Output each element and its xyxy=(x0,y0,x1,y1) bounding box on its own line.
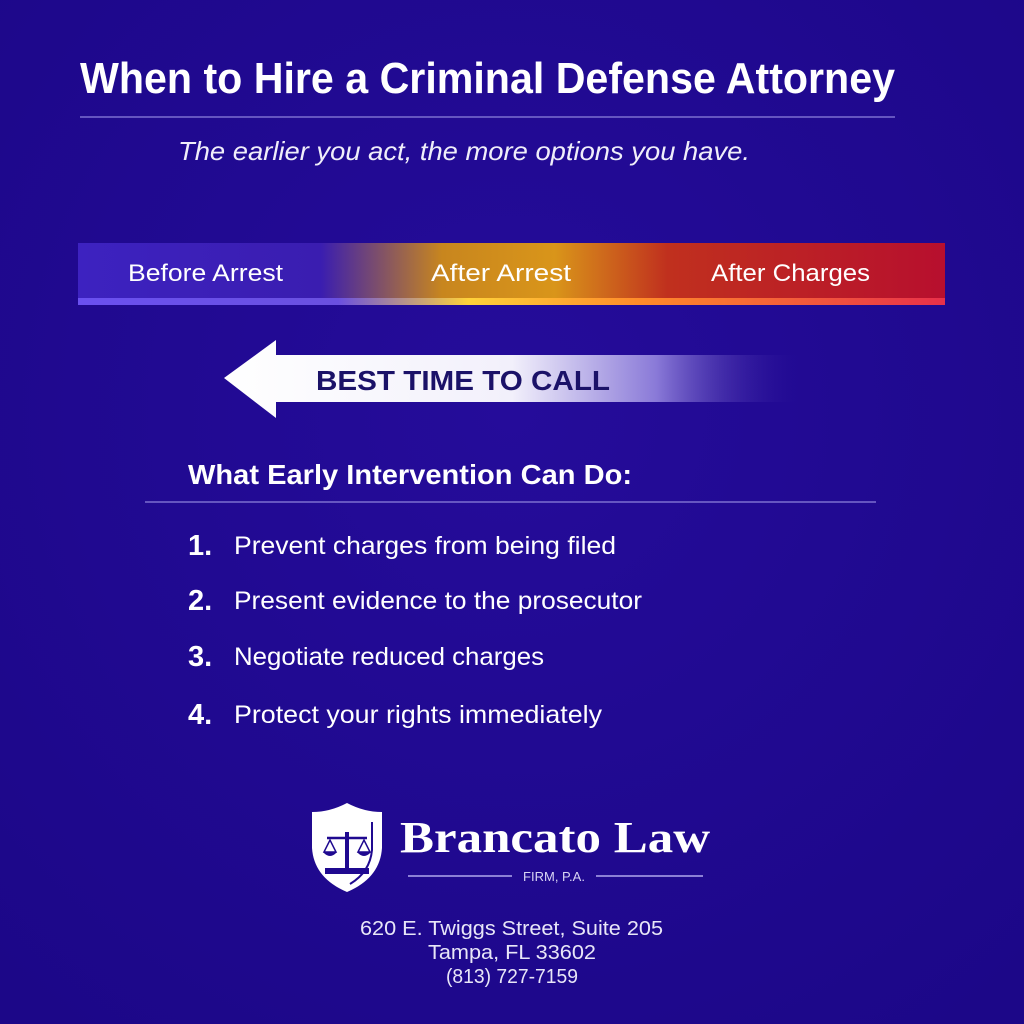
list: Present evidence to the prosecutor xyxy=(234,587,642,615)
title: When to Hire a Criminal Defense Attorney xyxy=(80,54,895,103)
list: 1. xyxy=(188,530,212,562)
arrow: best time to call: BEST TIME TO CALL xyxy=(316,365,610,396)
icon: shield with scales xyxy=(312,803,382,892)
address: Tampa, FL 33602 xyxy=(428,942,596,964)
logo xyxy=(312,803,710,892)
arrow: best time to call xyxy=(224,340,800,418)
timeline bar xyxy=(78,243,945,305)
address xyxy=(360,918,663,988)
address: 620 E. Twiggs Street, Suite 205 xyxy=(360,918,663,940)
label: after charges: After Charges xyxy=(711,260,870,287)
list: Protect your rights immediately xyxy=(234,701,603,729)
list: Negotiate reduced charges xyxy=(234,643,544,671)
label: before arrest: Before Arrest xyxy=(128,260,283,287)
list xyxy=(188,530,642,731)
subtitle: The earlier you act, the more options you have. xyxy=(178,136,750,166)
logo: Brancato Law xyxy=(400,813,710,862)
address: (813) 727-7159 xyxy=(446,966,578,988)
list: 4. xyxy=(188,699,212,731)
list: 2. xyxy=(188,585,212,617)
list: 3. xyxy=(188,641,212,673)
logo: FIRM, P.A. xyxy=(523,869,585,884)
list: Prevent charges from being filed xyxy=(234,532,616,560)
heading: early intervention: What Early Intervention Can Do: xyxy=(188,459,632,490)
label: after arrest: After Arrest xyxy=(431,260,571,287)
